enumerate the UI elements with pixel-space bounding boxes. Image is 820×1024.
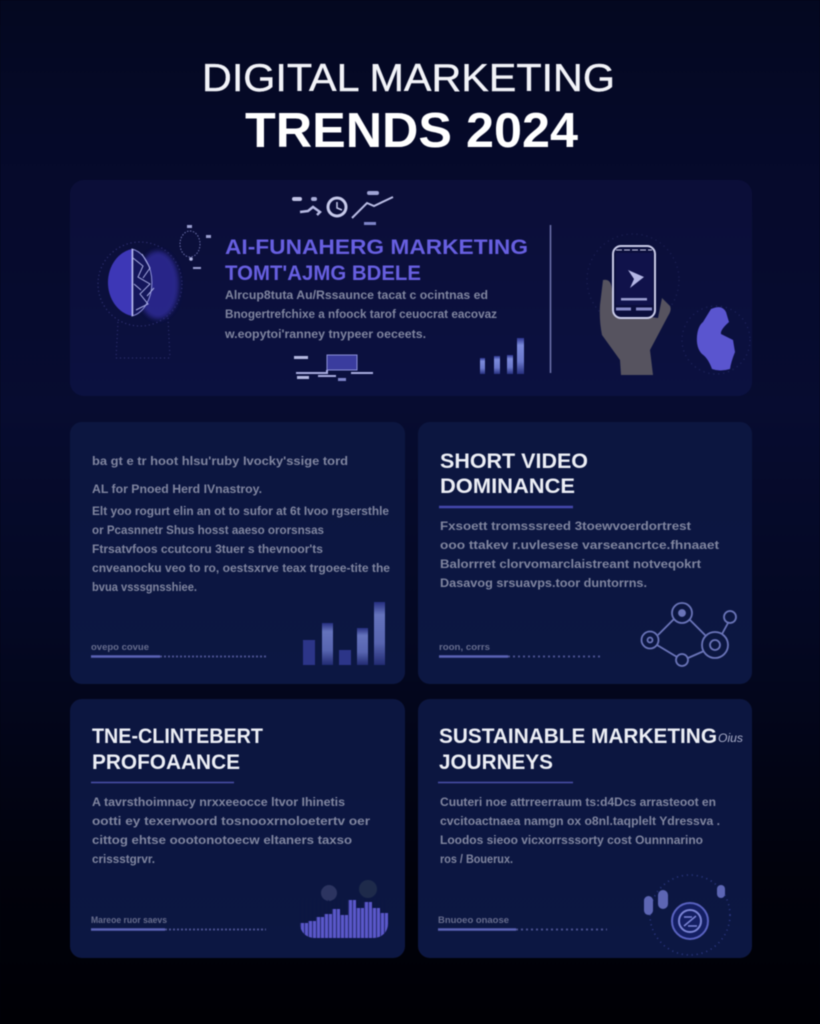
text block: performance body: cittog ehtse oootonotoecw eltaners taxso xyxy=(92,833,352,847)
heading: performance: TNE-CLINTEBERT xyxy=(92,725,263,748)
icon: hand holding phone xyxy=(587,234,679,375)
panel: AI-enhanced marketing hero xyxy=(70,180,752,396)
heading: hero: AI-FUNAHERG MARKETING xyxy=(225,236,528,259)
title: TRENDS 2024 xyxy=(245,104,578,158)
title: DIGITAL MARKETING xyxy=(202,57,615,100)
text block: hero body: w.eopytoi'ranney tnypeer oeceets. xyxy=(224,327,426,341)
panel: sustainable marketing journeys xyxy=(418,699,752,958)
text block: sustainable body xyxy=(440,795,720,866)
heading: hero xyxy=(225,236,528,285)
heading: sustainable marketing xyxy=(439,725,743,774)
icon: top analytics glyphs xyxy=(292,191,393,225)
heading: short video: DOMINANCE xyxy=(440,475,575,498)
text block: performance body: A tavrsthoimnacy nrxxeeocce ltvor Ihinetis xyxy=(92,795,345,809)
icon: bottom dashboard glyph xyxy=(294,355,373,381)
text block: hero body: Bnogertrefchixe a nfoock tarof ceuocrat eacovaz xyxy=(225,307,497,321)
heading: short video xyxy=(440,450,588,498)
text block: performance body xyxy=(92,795,370,866)
heading: sustainable marketing: SUSTAINABLE MARKETING xyxy=(439,725,717,748)
chart: area bars xyxy=(300,880,388,939)
text block: hero body: Alrcup8tuta Au/Rssaunce tacat c ocintnas ed xyxy=(225,288,488,302)
heading: sustainable marketing: JOURNEYS xyxy=(439,751,553,774)
title xyxy=(202,57,615,158)
text block: short video body: Dasavog srsuavps.toor duntorrns. xyxy=(440,576,647,590)
heading: hero: TOMT'AJMG BDELE xyxy=(225,262,421,285)
progress footer: Bnuoeo onaose xyxy=(438,915,509,925)
panel: short video dominance xyxy=(418,422,752,684)
text block: card one body: Elt yoo rogurt elin an ot to sufor at 6t Ivoo rgsersthle xyxy=(92,504,389,518)
text block: card one body: bvua vsssgnsshiee. xyxy=(92,580,197,594)
bar chart xyxy=(303,602,385,665)
heading: performance: PROFOAANCE xyxy=(92,751,240,774)
text block: sustainable body: cvcitoactnaea namgn ox o8nl.taqplelt Ydressva . xyxy=(440,814,720,828)
icon: purple blob xyxy=(682,306,750,374)
heading: short video: SHORT VIDEO xyxy=(440,450,588,473)
text block: sustainable body: Cuuteri noe attrreerraum ts:d4Dcs arrasteoot en xyxy=(440,795,716,809)
text block: card one body xyxy=(92,482,390,594)
chart: hero mini bars xyxy=(480,338,524,374)
text block: card one body: Ftrsatvfoos ccutcoru 3tuer s thevnoor'ts xyxy=(92,542,323,556)
text block: hero body xyxy=(224,288,497,341)
text block: short video body: Balorrret clorvomarclaistreant notveqokrt xyxy=(440,557,701,571)
icon: network nodes xyxy=(642,603,736,666)
text block: card one body: cnveanocku veo to ro, oestsxrve teax trgoee-tite the xyxy=(92,561,390,575)
progress footer: roon, corrs xyxy=(439,642,490,652)
text block: performance body: ootti ey texerwoord tosnooxrnoloetertv oer xyxy=(92,814,370,828)
progress footer: Mareoe ruor saevs xyxy=(91,915,167,925)
text block: card one body: or Pcasnnetr Shus hosst aaeso ororsnsas xyxy=(92,523,324,537)
heading: card one: ba gt e tr hoot hlsu'ruby Ivocky'ssige tord xyxy=(92,454,348,468)
heading: sustainable marketing: Oius xyxy=(718,731,743,745)
text block: short video body: Fxsoett tromsssreed 3toewvoerdortrest xyxy=(440,519,691,533)
text block: sustainable body: ros / Bouerux. xyxy=(440,852,513,866)
panel: bottom-left text card xyxy=(70,422,405,684)
text block: card one body: AL for Pnoed Herd IVnastroy. xyxy=(92,482,262,496)
text block: sustainable body: Loodos sieoo vicxorrsssorty cost Ounnnarino xyxy=(440,833,703,847)
progress footer: ovepo covue xyxy=(91,642,149,652)
text block: short video body: ooo ttakev r.uvlesese varseancrtce.fhnaaet xyxy=(440,538,719,552)
text block: performance body: crissstgrvr. xyxy=(92,852,155,866)
text block: short video body xyxy=(440,519,719,590)
icon: coins and badge xyxy=(644,875,730,955)
heading: performance xyxy=(92,725,263,774)
panel: in-content performance xyxy=(70,699,405,958)
icon: AI brain head xyxy=(98,225,211,358)
